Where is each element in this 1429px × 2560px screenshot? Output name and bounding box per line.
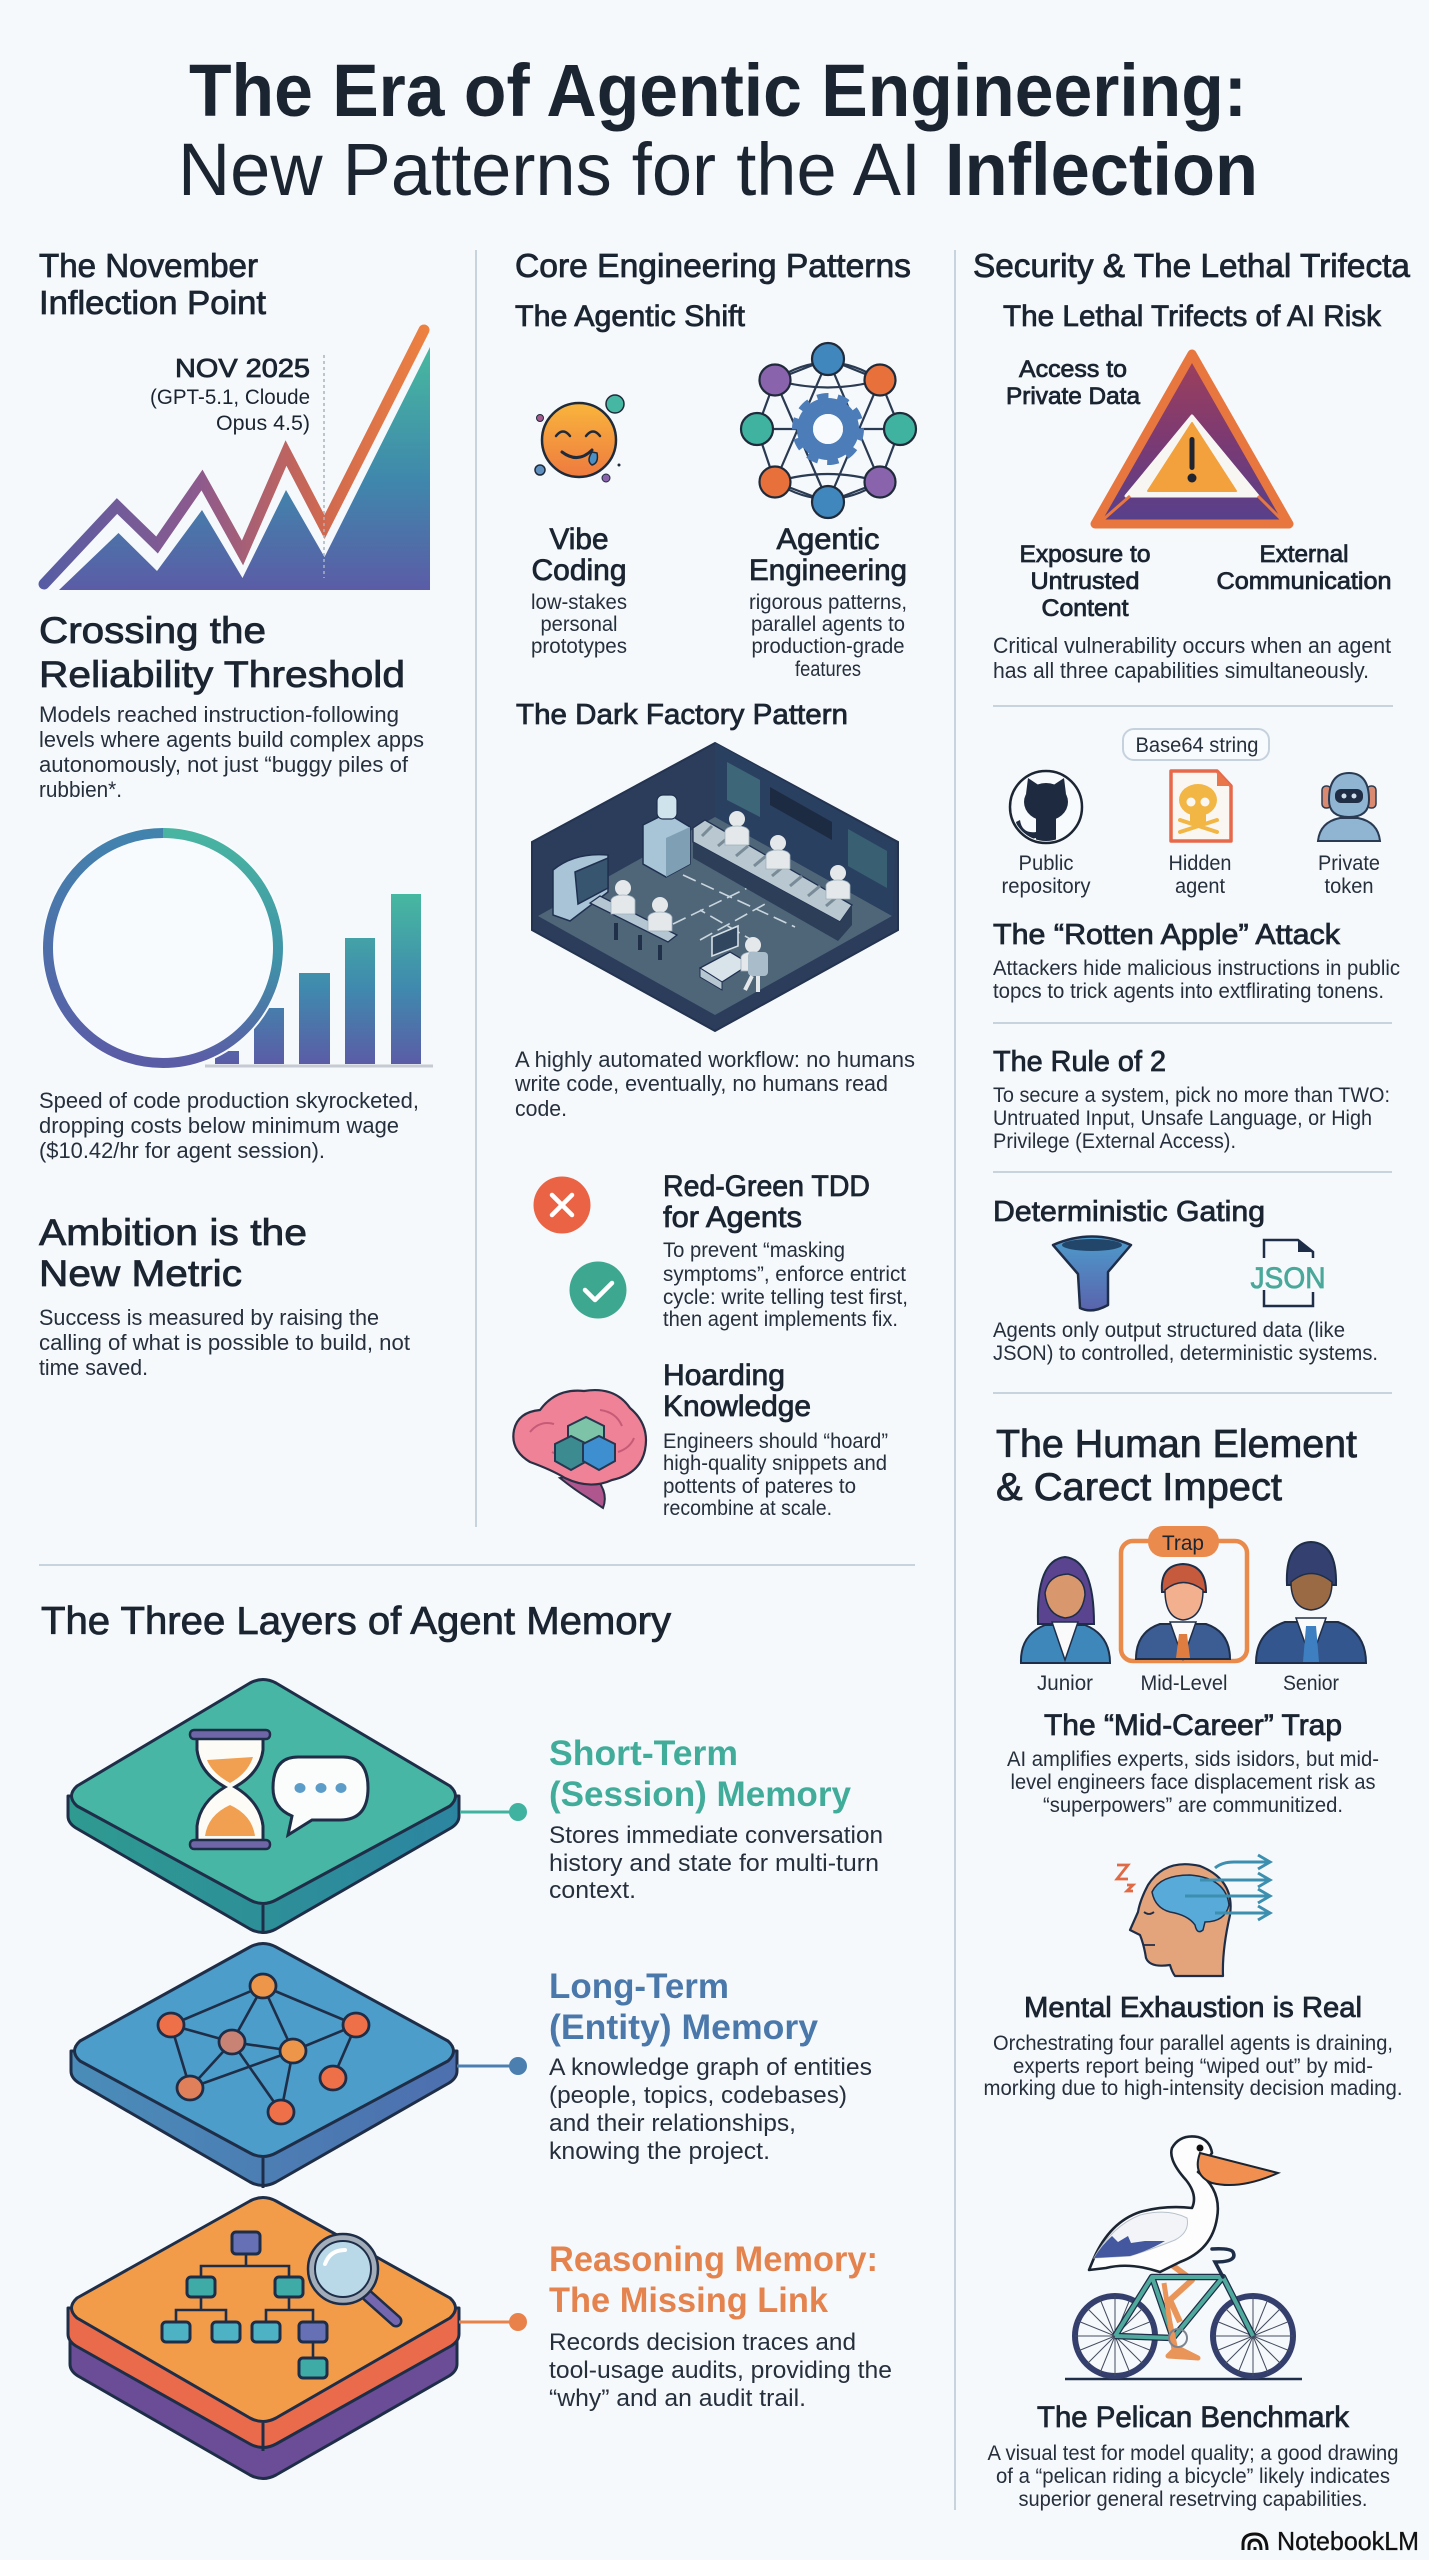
connector: short-term: [460, 1803, 527, 1821]
label: vibe coding: prototypes: [531, 635, 627, 658]
icon: vibe coding emoji: [535, 395, 624, 482]
panel: mental exhaustion: [984, 1992, 1402, 2100]
label: access to private data: Private Data: [1006, 383, 1141, 410]
panel: hoarding knowledge: high-quality snippets and: [663, 1452, 887, 1475]
text: ambition description: [39, 1305, 410, 1380]
chart annotation: Nov 2025: NOV 2025: [175, 353, 310, 383]
icon: github repository: [1010, 771, 1082, 845]
pill: base64 string: Base64 string: [1136, 734, 1258, 757]
chart annotation: Nov 2025: Opus 4.5): [216, 412, 310, 435]
title: The Era of Agentic Engineering:: [189, 49, 1247, 132]
illustration: career levels: [1021, 1526, 1366, 1695]
panel: reliability threshold: [39, 610, 424, 802]
labels: attack chain: [1002, 852, 1380, 898]
icon: magnifier: [308, 2234, 396, 2321]
icon: JSON document: JSON: [1250, 1262, 1326, 1295]
panel: mid-career trap: level engineers face displacement risk as: [1010, 1771, 1376, 1794]
logo: NotebookLM: NotebookLM: [1277, 2526, 1419, 2556]
area chart: inflection curve: [44, 330, 430, 590]
text: reliability description: autonomously, not just “buggy piles of: [39, 752, 409, 777]
factory machine: left: [553, 855, 608, 921]
illustration: dark factory: [532, 743, 898, 1031]
heading: November inflection: [39, 247, 266, 321]
label: agentic engineering: [749, 523, 907, 681]
bicycle wheels: [1075, 2296, 1293, 2376]
labels: attack chain: Hidden: [1168, 852, 1232, 875]
icon: knowledge graph: [158, 1974, 369, 2124]
panel: hoarding knowledge: Engineers should “hoard”: [663, 1430, 888, 1453]
text: reasoning memory: “why” and an audit trail.: [549, 2385, 806, 2412]
text: ambition description: time saved.: [39, 1355, 148, 1380]
panel: pelican benchmark: [988, 2401, 1398, 2511]
text: reliability description: levels where agents build complex apps: [39, 727, 424, 752]
icon: decision tree: [162, 2232, 327, 2378]
label: agentic engineering: parallel agents to: [751, 613, 905, 636]
panel: red-green TDD: symptoms”, enforce entrict: [663, 1263, 906, 1286]
text: deterministic gating description: JSON) to controlled, deterministic systems.: [993, 1342, 1378, 1365]
icon: hidden agent skull document: [1171, 771, 1231, 841]
panel: November inflection point: [39, 247, 430, 590]
heading: the agentic shift: The Agentic Shift: [515, 300, 746, 333]
panel: mid-career trap: “superpowers” are communitized.: [1043, 1794, 1343, 1817]
icon: agentic network: [741, 343, 916, 518]
label: agentic engineering: rigorous patterns,: [749, 591, 907, 614]
text: long-term memory: (people, topics, codebases): [549, 2082, 847, 2109]
text: short-term memory: Stores immediate conversation: [549, 1822, 883, 1849]
text: critical vulnerability: Critical vulnerability occurs when an agent: [993, 633, 1391, 658]
panel: rule of 2: To secure a system, pick no more than TWO:: [993, 1084, 1390, 1107]
labels: attack chain: repository: [1002, 875, 1091, 898]
text: code speed description: ($10.42/hr for agent session).: [39, 1138, 325, 1163]
text: dark factory description: code.: [515, 1096, 567, 1121]
pelican beak: [1198, 2153, 1278, 2185]
panel: rule of 2: Untruated Input, Unsafe Language, or High: [993, 1107, 1372, 1130]
factory machine: back with tank: [643, 795, 690, 877]
text: long-term memory: [549, 1967, 872, 2165]
text: short-term memory: history and state for multi-turn: [549, 1850, 879, 1877]
chart annotation: Nov 2025: [150, 353, 310, 435]
layer 2: long-term memory platform: [71, 1944, 457, 2188]
person: junior: [1021, 1557, 1110, 1663]
panel: mental exhaustion: morking due to high-intensity decision mading.: [984, 2077, 1402, 2100]
label: vibe coding: Vibe: [550, 523, 608, 556]
pelican body: [1089, 2136, 1218, 2272]
panel: hoarding knowledge: Knowledge: [663, 1390, 811, 1423]
panel: rotten apple attack: topcs to trick agents into extflirating tonens.: [993, 980, 1384, 1003]
heading: crossing the reliability threshold: Crossing the: [39, 610, 266, 651]
label: access to private data: [1006, 356, 1141, 410]
icon: JSON document: [1250, 1240, 1326, 1306]
text: reasoning memory: [549, 2240, 892, 2412]
panel: hoarding knowledge: recombine at scale.: [663, 1497, 832, 1520]
labels: career levels: Mid-Level: [1140, 1672, 1228, 1695]
panel: rotten apple attack: [993, 919, 1400, 1003]
heading: crossing the reliability threshold: [39, 610, 405, 695]
label: exposure to untrusted content: Content: [1042, 595, 1129, 622]
label: external communication: [1216, 541, 1392, 595]
icon: brain with cubes: [513, 1390, 646, 1508]
connector: reasoning: [459, 2313, 527, 2331]
person: mid-level highlighted: [1121, 1526, 1247, 1661]
connector: long-term: [457, 2057, 527, 2075]
control desk with operator: [700, 926, 768, 992]
icon: funnel: [1053, 1236, 1131, 1310]
panel: rule of 2: Privilege (External Access).: [993, 1130, 1236, 1153]
title: New Patterns for the AI: [178, 128, 921, 211]
heading: ambition is the new metric: Ambition is the: [39, 1212, 307, 1253]
label: exposure to untrusted content: Exposure to: [1020, 541, 1150, 568]
text: ambition description: calling of what is possible to build, not: [39, 1330, 410, 1355]
panel: pelican benchmark: superior general resetrving capabilities.: [1018, 2488, 1368, 2511]
heading: crossing the reliability threshold: Reliability Threshold: [39, 654, 405, 695]
labels: career levels: [1037, 1672, 1339, 1695]
panel: rule of 2: [993, 1046, 1390, 1153]
panel: rule of 2: The Rule of 2: [993, 1046, 1166, 1078]
panel: pelican benchmark: The Pelican Benchmark: [1037, 2401, 1350, 2434]
icon: hourglass: [190, 1730, 270, 1849]
label: agentic engineering: production-grade: [752, 635, 904, 658]
text: code speed description: dropping costs below minimum wage: [39, 1113, 399, 1138]
heading: ambition is the new metric: [39, 1212, 307, 1294]
labels: attack chain: token: [1324, 875, 1374, 898]
heading: core engineering patterns: Core Engineering Patterns: [515, 247, 911, 284]
text: deterministic gating description: [993, 1319, 1378, 1365]
panel: hoarding knowledge: pottents of pateres to: [663, 1475, 856, 1498]
text: long-term memory: (Entity) Memory: [549, 2008, 819, 2047]
label: exposure to untrusted content: Untrusted: [1030, 568, 1140, 595]
heading: November inflection: Inflection Point: [39, 284, 266, 321]
text: short-term memory: Short-Term: [549, 1734, 738, 1773]
label: agentic engineering: features: [795, 658, 861, 681]
panel: rotten apple attack: Attackers hide malicious instructions in public: [993, 957, 1400, 980]
icon: exhausted head with arrows: [1117, 1855, 1270, 1976]
label: exposure to untrusted content: [1020, 541, 1150, 622]
text: deterministic gating description: Agents only output structured data (like: [993, 1319, 1345, 1342]
panel: red-green TDD: cycle: write telling test first,: [663, 1286, 908, 1309]
label: vibe coding: [531, 523, 627, 658]
panel: red-green TDD: then agent implements fix.: [663, 1308, 898, 1331]
text: dark factory description: write code, eventually, no humans read: [514, 1071, 888, 1096]
text: code speed description: [39, 1088, 419, 1163]
heading: the human element: & Carect Impect: [996, 1466, 1282, 1509]
heading: the human element: [996, 1423, 1357, 1509]
panel: red-green TDD: for Agents: [663, 1201, 802, 1234]
text: reasoning memory: Records decision traces and: [549, 2329, 856, 2356]
text: short-term memory: [549, 1734, 883, 1904]
bicycle frame: [1115, 2277, 1253, 2338]
panel: mid-career trap: [1007, 1709, 1379, 1817]
person: senior: [1256, 1542, 1366, 1663]
panel: red-green TDD: To prevent “masking: [663, 1239, 845, 1262]
text: reliability description: [39, 702, 424, 802]
heading: the human element: The Human Element: [996, 1423, 1357, 1466]
text: reliability description: rubbien*.: [39, 777, 122, 802]
text: reliability description: Models reached instruction-following: [39, 702, 399, 727]
conveyor belt: [693, 820, 852, 941]
label: access to private data: Access to: [1019, 356, 1127, 383]
text: critical vulnerability: [993, 633, 1391, 683]
panel: ambition metric: [39, 1212, 410, 1380]
icon: green pass circle: [570, 1262, 626, 1318]
chart: ring and rising bars: [41, 826, 433, 1070]
panel: mental exhaustion: Orchestrating four parallel agents is draining,: [993, 2032, 1393, 2055]
icon: private token robot: [1318, 773, 1380, 841]
chart annotation: Nov 2025: (GPT-5.1, Cloude: [150, 386, 310, 409]
panel: red-green TDD: [663, 1170, 908, 1331]
text: reasoning memory: The Missing Link: [549, 2281, 829, 2320]
title: Inflection: [945, 128, 1258, 211]
pelican back leg: [1170, 2265, 1192, 2322]
labels: attack chain: agent: [1175, 875, 1225, 898]
panel: rotten apple attack: The “Rotten Apple” Attack: [993, 919, 1341, 951]
labels: career levels: Senior: [1283, 1672, 1339, 1695]
panel: mid-career trap: The “Mid-Career” Trap: [1044, 1709, 1342, 1742]
heading: three layers of agent memory: The Three Layers of Agent Memory: [41, 1600, 672, 1643]
text: dark factory description: [514, 1047, 915, 1121]
panel: hoarding knowledge: [663, 1359, 888, 1520]
robot workers: [611, 811, 850, 931]
text: long-term memory: Long-Term: [549, 1967, 729, 2006]
heading: lethal trifecta of AI risk: The Lethal Trifects of AI Risk: [1003, 300, 1382, 333]
label: external communication: Communication: [1216, 568, 1392, 595]
text: dark factory description: A highly automated workflow: no humans: [515, 1047, 915, 1072]
label: vibe coding: Coding: [532, 554, 626, 587]
label: vibe coding: low-stakes: [531, 591, 627, 614]
icon: lethal trifecta triangle: [1095, 354, 1289, 524]
icon: speech bubble: [273, 1757, 368, 1835]
illustration: pelican riding a bicycle: [1065, 2136, 1302, 2379]
panel: pelican benchmark: of a “pelican riding a bicycle” likely indicates: [996, 2465, 1390, 2488]
heading: dark factory pattern: The Dark Factory Pattern: [516, 699, 848, 731]
layer 3: reasoning memory platform: [68, 2198, 459, 2478]
text: code speed description: Speed of code production skyrocketed,: [39, 1088, 419, 1113]
assembly table left: [590, 896, 677, 960]
icon: red fail circle: [534, 1176, 590, 1234]
text: long-term memory: and their relationships,: [549, 2110, 796, 2137]
text: short-term memory: context.: [549, 1877, 636, 1904]
panel: mid-career trap: AI amplifies experts, sids isidors, but mid-: [1007, 1748, 1379, 1771]
panel: pelican benchmark: A visual test for model quality; a good drawing: [988, 2442, 1398, 2465]
label: external communication: External: [1260, 541, 1348, 568]
text: long-term memory: knowing the project.: [549, 2138, 770, 2165]
text: reasoning memory: Reasoning Memory:: [549, 2240, 878, 2279]
label: vibe coding: personal: [540, 613, 618, 636]
panel: mental exhaustion: experts report being “wiped out” by mid-: [1013, 2055, 1373, 2078]
heading: November inflection: The November: [39, 247, 258, 284]
heading: security and the lethal trifecta: Security & The Lethal Trifecta: [973, 247, 1411, 284]
labels: career levels: Junior: [1037, 1672, 1093, 1695]
label: agentic engineering: Agentic: [776, 523, 880, 556]
person: mid-level highlighted: Trap: [1162, 1532, 1204, 1555]
text: short-term memory: (Session) Memory: [549, 1775, 852, 1814]
labels: attack chain: Private: [1318, 852, 1380, 875]
panel: hoarding knowledge: Hoarding: [663, 1359, 785, 1392]
handlebar: [1212, 2249, 1234, 2277]
labels: attack chain: Public: [1018, 852, 1074, 875]
text: critical vulnerability: has all three capabilities simultaneously.: [993, 658, 1369, 683]
text: reasoning memory: tool-usage audits, providing the: [549, 2357, 892, 2384]
title: [178, 49, 1258, 211]
pelican wing: [1094, 2212, 1188, 2258]
heading: ambition is the new metric: New Metric: [39, 1253, 242, 1294]
pill: base64 string: [1123, 729, 1269, 760]
text: ambition description: Success is measured by raising the: [39, 1305, 379, 1330]
layer 1: short-term memory platform: [68, 1680, 459, 1934]
heading: deterministic gating: Deterministic Gating: [993, 1196, 1265, 1228]
text: long-term memory: A knowledge graph of entities: [549, 2054, 872, 2081]
panel: mental exhaustion: Mental Exhaustion is Real: [1024, 1992, 1362, 2024]
pelican front leg and foot: [1164, 2283, 1198, 2358]
panel: red-green TDD: Red-Green TDD: [663, 1170, 870, 1203]
label: agentic engineering: Engineering: [749, 554, 907, 587]
